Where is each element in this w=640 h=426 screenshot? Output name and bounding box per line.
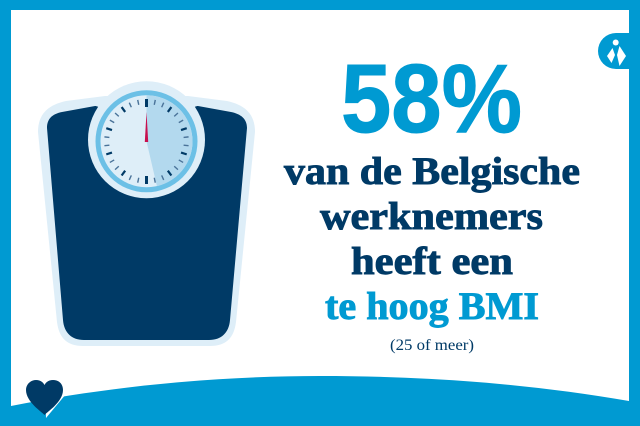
line: te hoog BMI: te hoog BMI — [325, 285, 539, 328]
footnote: (25 of meer) — [390, 337, 474, 354]
scale body outline — [38, 96, 255, 346]
dial ticks — [104, 99, 189, 184]
dial 58 percent sector — [146, 95, 192, 186]
line: werknemers: werknemers — [320, 195, 543, 238]
dial blue ring — [96, 90, 198, 192]
icon: heart — [26, 380, 66, 418]
dial face — [100, 95, 192, 187]
scale body — [47, 106, 247, 340]
dial outer ring — [88, 81, 205, 198]
statement text — [284, 150, 580, 328]
headline figure: 58% — [341, 44, 522, 153]
line: heeft een: heeft een — [351, 240, 513, 283]
line: van de Belgische: van de Belgische — [284, 150, 580, 193]
scale illustration — [38, 81, 255, 346]
dial needle — [145, 112, 148, 142]
icon: logo tab — [598, 33, 630, 69]
